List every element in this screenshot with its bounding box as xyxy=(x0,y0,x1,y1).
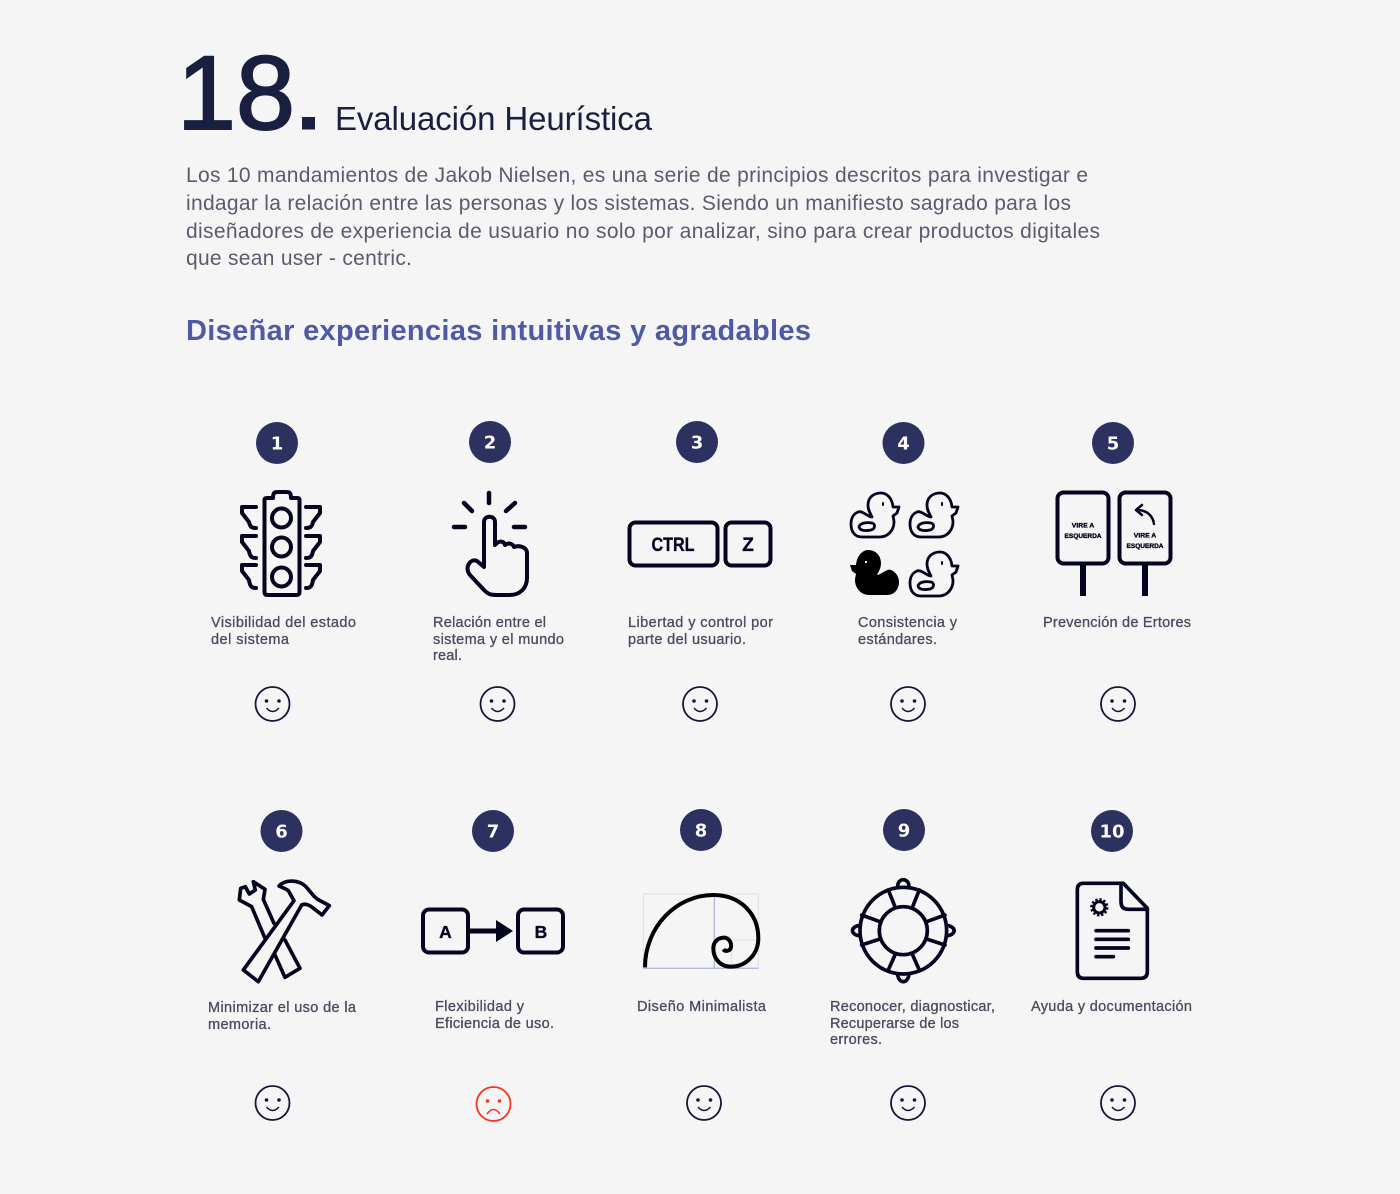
item 1 label: Visibilidad del estado xyxy=(211,615,356,631)
number badge 7 xyxy=(472,810,514,852)
number badge 5: 5 xyxy=(1107,434,1119,454)
panel: item 7 xyxy=(423,810,563,1121)
icon: document with gear xyxy=(1077,883,1147,978)
intro text block: que sean user - centric. xyxy=(186,247,412,270)
item 2 label: Relación entre el xyxy=(433,615,546,631)
number badge 4 xyxy=(882,422,924,464)
panel: item 3 xyxy=(628,421,773,721)
item 1 label xyxy=(211,615,356,648)
icon: traffic light xyxy=(242,492,320,595)
item 2 label xyxy=(433,615,564,664)
smiley face xyxy=(256,687,290,721)
item 6 label: Minimizar el uso de la xyxy=(208,1000,357,1016)
number badge 2 xyxy=(469,421,511,463)
item 5 label: Prevención de Ertores xyxy=(1043,615,1191,631)
panel: item 8 xyxy=(637,809,767,1120)
number badge 2: 2 xyxy=(484,432,496,454)
icon: ctrl z keys: Z xyxy=(742,535,754,556)
item 7 label xyxy=(435,999,554,1032)
number badge 9: 9 xyxy=(898,820,910,842)
number badge 8 xyxy=(680,809,722,851)
number badge 9 xyxy=(883,809,925,851)
title: 18 xyxy=(177,35,295,152)
number badge 3 xyxy=(676,421,718,463)
panel: item 2 xyxy=(433,421,564,721)
item 7 label: Eficiencia de uso. xyxy=(435,1016,554,1032)
intro text block: Los 10 mandamientos de Jakob Nielsen, es una serie de principios descritos para investigar e xyxy=(186,164,1088,187)
title xyxy=(177,35,653,152)
icon: ctrl z keys: CTRL xyxy=(652,535,695,556)
panel: item 4 xyxy=(850,422,958,721)
number badge 3: 3 xyxy=(691,432,703,454)
smiley face xyxy=(891,1086,925,1120)
icon: golden spiral xyxy=(643,894,758,968)
intro text block: diseñadores de experiencia de usuario no solo por analizar, sino para crear productos digitales xyxy=(186,220,1100,243)
icon: A to B flow: A xyxy=(439,922,452,942)
smiley face xyxy=(891,687,925,721)
icon: pointing hand xyxy=(454,493,527,595)
item 9 label: errores. xyxy=(830,1032,882,1048)
item 9 label xyxy=(830,999,995,1048)
item 10 label: Ayuda y documentación xyxy=(1031,999,1192,1015)
number badge 1: 1 xyxy=(271,434,283,454)
smiley face xyxy=(1101,687,1135,721)
panel: item 9 xyxy=(830,809,995,1120)
smiley face xyxy=(1101,1086,1135,1120)
smiley face xyxy=(687,1086,721,1120)
icon: road signs xyxy=(1058,492,1170,596)
icon: road signs: ESQUERDA xyxy=(1126,543,1164,550)
icon: wrench and hammer xyxy=(239,881,329,982)
item 1 label: del sistema xyxy=(211,632,290,648)
panel: item 1 xyxy=(211,422,356,721)
item 2 label: real. xyxy=(433,648,462,664)
number badge 10: 10 xyxy=(1099,822,1125,842)
item 9 label: Reconocer, diagnosticar, xyxy=(830,999,995,1015)
heading: Diseñar experiencias intuitivas y agradables xyxy=(186,315,811,347)
title: Evaluación Heurística xyxy=(335,100,653,137)
number badge 10 xyxy=(1091,810,1133,852)
item 3 label xyxy=(628,615,773,648)
panel: item 5 xyxy=(1043,422,1191,721)
number badge 7: 7 xyxy=(487,822,499,842)
item 4 label xyxy=(858,615,958,648)
item 4 label: estándares. xyxy=(858,632,937,648)
number badge 4: 4 xyxy=(897,434,910,454)
panel: item 10 xyxy=(1031,810,1192,1120)
number badge 6 xyxy=(260,810,302,852)
icon: rubber ducks xyxy=(850,493,958,596)
sad face xyxy=(476,1087,510,1121)
item 2 label: sistema y el mundo xyxy=(433,632,564,648)
icon: road signs: VIRE A xyxy=(1134,532,1156,540)
icon: A to B flow: B xyxy=(535,922,547,942)
panel: item 6 xyxy=(208,810,357,1120)
number badge 6: 6 xyxy=(275,822,288,842)
item 3 label: parte del usuario. xyxy=(628,632,746,648)
intro text block xyxy=(186,164,1100,270)
item 8 label: Diseño Minimalista xyxy=(637,999,767,1015)
icon: life ring xyxy=(852,880,954,982)
item 9 label: Recuperarse de los xyxy=(830,1016,959,1032)
item 3 label: Libertad y control por xyxy=(628,615,773,631)
number badge 8: 8 xyxy=(695,820,707,842)
icon: road signs: ESQUERDA xyxy=(1064,533,1102,540)
item 6 label: memoria. xyxy=(208,1017,271,1033)
smiley face xyxy=(256,1086,290,1120)
icon: ctrl z keys xyxy=(630,522,770,566)
item 7 label: Flexibilidad y xyxy=(435,999,525,1015)
item 4 label: Consistencia y xyxy=(858,615,958,631)
number badge 1 xyxy=(256,422,298,464)
icon: road signs: VIRE A xyxy=(1072,522,1094,530)
intro text block: indagar la relación entre las personas y los sistemas. Siendo un manifiesto sagrado para los xyxy=(186,192,1071,215)
number badge 5 xyxy=(1092,422,1134,464)
icon: A to B flow xyxy=(423,910,563,952)
item 6 label xyxy=(208,1000,357,1033)
smiley face xyxy=(683,687,717,721)
smiley face xyxy=(480,687,514,721)
